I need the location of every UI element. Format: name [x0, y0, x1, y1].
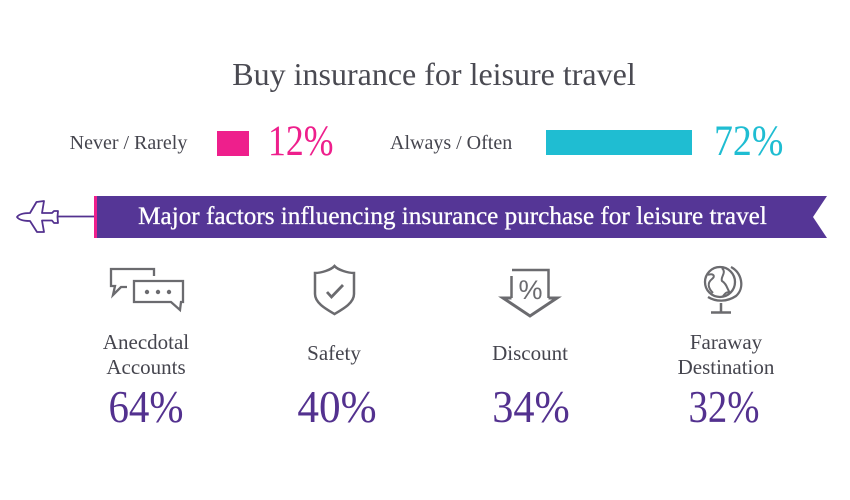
value: 12%: 12%	[268, 118, 333, 165]
legend: always / often	[390, 118, 783, 165]
factor: safety	[297, 341, 377, 432]
value: 34%	[492, 382, 570, 432]
bar: never / rarely	[217, 131, 249, 156]
label	[103, 330, 189, 379]
label: Anecdotal	[103, 330, 189, 354]
value: 72%: 72%	[714, 118, 783, 165]
factor: anecdotal accounts	[103, 330, 189, 432]
factor: discount	[492, 341, 570, 432]
banner text: Major factors influencing insurance purchase for leisure travel	[138, 203, 767, 230]
icon: percent discount arrow: %	[518, 275, 543, 305]
label: Faraway	[690, 330, 762, 354]
icon: airplane with line	[16, 200, 94, 233]
icon: percent discount arrow	[498, 268, 562, 318]
factor: faraway destination	[678, 330, 774, 432]
value: 64%	[108, 382, 184, 432]
label: always / often: Always / Often	[390, 132, 512, 154]
icon: shield with check	[314, 264, 356, 316]
label: Discount	[492, 341, 568, 365]
label: never / rarely: Never / Rarely	[70, 132, 187, 154]
bar: always / often	[546, 130, 692, 155]
icon: speech bubbles	[110, 268, 184, 312]
label: Destination	[678, 355, 774, 379]
icon: globe	[704, 266, 742, 314]
value: 32%	[689, 382, 759, 432]
label: Safety	[307, 341, 361, 365]
label: Accounts	[106, 355, 186, 379]
legend: never / rarely	[70, 118, 333, 165]
value: 40%	[297, 382, 377, 432]
label	[678, 330, 774, 379]
banner	[94, 196, 827, 238]
title: Buy insurance for leisure travel	[232, 56, 636, 92]
